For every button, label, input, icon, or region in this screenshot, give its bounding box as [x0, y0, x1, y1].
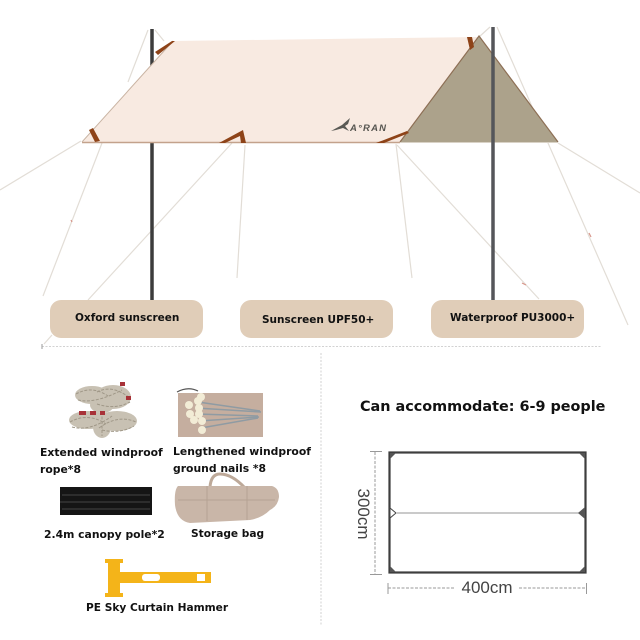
text: rope — [40, 446, 163, 476]
label: waterproof: Waterproof PU3000+ — [450, 312, 575, 324]
heading: capacity: Can accommodate: 6-9 people — [360, 399, 605, 415]
label: sunscreen upf — [240, 300, 393, 338]
illustration: canopy tent — [0, 26, 640, 344]
rope markers — [71, 220, 591, 285]
text: bag: Storage bag — [191, 528, 264, 540]
text: nails: ground nails *8 — [173, 462, 266, 475]
pole: left — [150, 29, 154, 300]
text: nails — [173, 445, 312, 475]
canopy khaki end panel — [400, 36, 558, 142]
text: rope: Extended windproof — [40, 446, 163, 459]
diagram: size: 300cm — [354, 488, 373, 540]
pole: right — [491, 27, 495, 300]
diagram: size: 400cm — [461, 578, 513, 597]
text: nails: Lengthened windproof — [173, 445, 311, 458]
brand logo: A°RAN — [349, 123, 387, 134]
label: waterproof — [431, 300, 584, 338]
label: sunscreen upf: Sunscreen UPF50+ — [262, 314, 374, 326]
corner reinforcements — [89, 37, 474, 143]
label: oxford sunscreen: Oxford sunscreen — [75, 312, 179, 324]
label: oxford sunscreen — [50, 300, 203, 338]
brand logo — [331, 118, 387, 134]
canopy roof — [82, 37, 479, 143]
guy ropes — [0, 27, 640, 344]
text: hammer: PE Sky Curtain Hammer — [86, 602, 228, 614]
text: rope: rope*8 — [40, 463, 81, 476]
text: pole: 2.4m canopy pole*2 — [44, 528, 165, 541]
